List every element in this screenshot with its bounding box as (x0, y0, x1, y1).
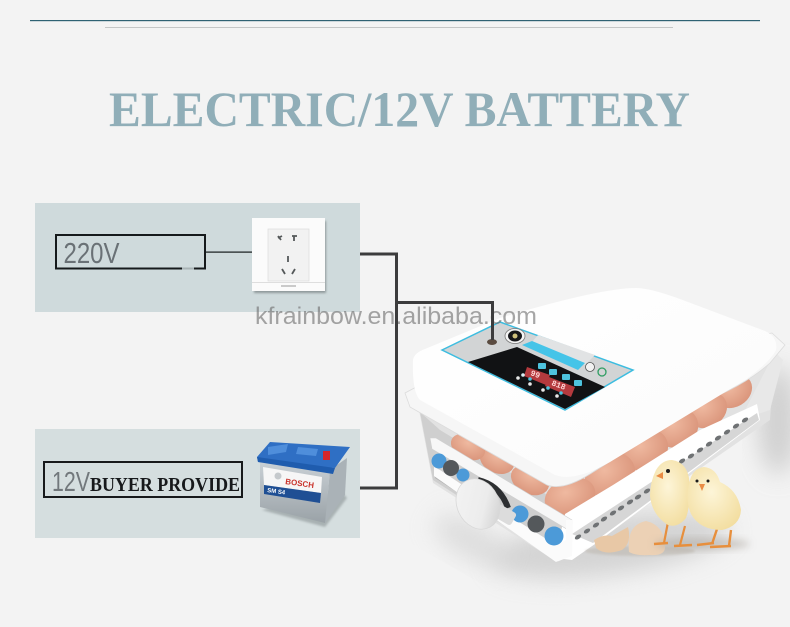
incubator base (418, 350, 783, 562)
LED displays: 99 (529, 369, 541, 381)
white dial (448, 472, 517, 536)
12V buyer provide label box: 12V (52, 466, 90, 497)
chicks (650, 460, 750, 550)
220V label box (56, 235, 205, 270)
power status icons (586, 362, 606, 376)
title: ELECTRIC/12V BATTERY (109, 81, 690, 137)
power socket port (487, 339, 497, 345)
LED displays: 818 (550, 379, 567, 393)
eggs (447, 367, 758, 524)
220V label box: 220V (64, 238, 120, 270)
eggshell (585, 521, 695, 556)
icon: car battery (257, 442, 350, 527)
power wiring (360, 254, 492, 488)
12V buyer provide label box (44, 462, 242, 497)
egg tray rail (555, 404, 760, 560)
watermark: kfrainbow.en.alibaba.com (255, 303, 537, 330)
panel: 12V battery (35, 429, 360, 538)
icon: car battery: SM S4 (267, 488, 286, 497)
chick left (650, 460, 692, 546)
chick right (687, 467, 741, 547)
control panel on lid (442, 322, 633, 410)
LED displays (524, 367, 575, 397)
12V buyer provide label box: BUYER PROVIDE (90, 475, 240, 496)
front rack with gears (430, 438, 573, 562)
temperature dial (505, 328, 525, 344)
icon: car battery: BOSCH (285, 477, 315, 490)
incubator lid (405, 288, 785, 487)
panel: 220V mains (35, 203, 360, 312)
icon: wall socket (252, 218, 326, 293)
control buttons (516, 363, 582, 398)
incubator (405, 288, 790, 591)
